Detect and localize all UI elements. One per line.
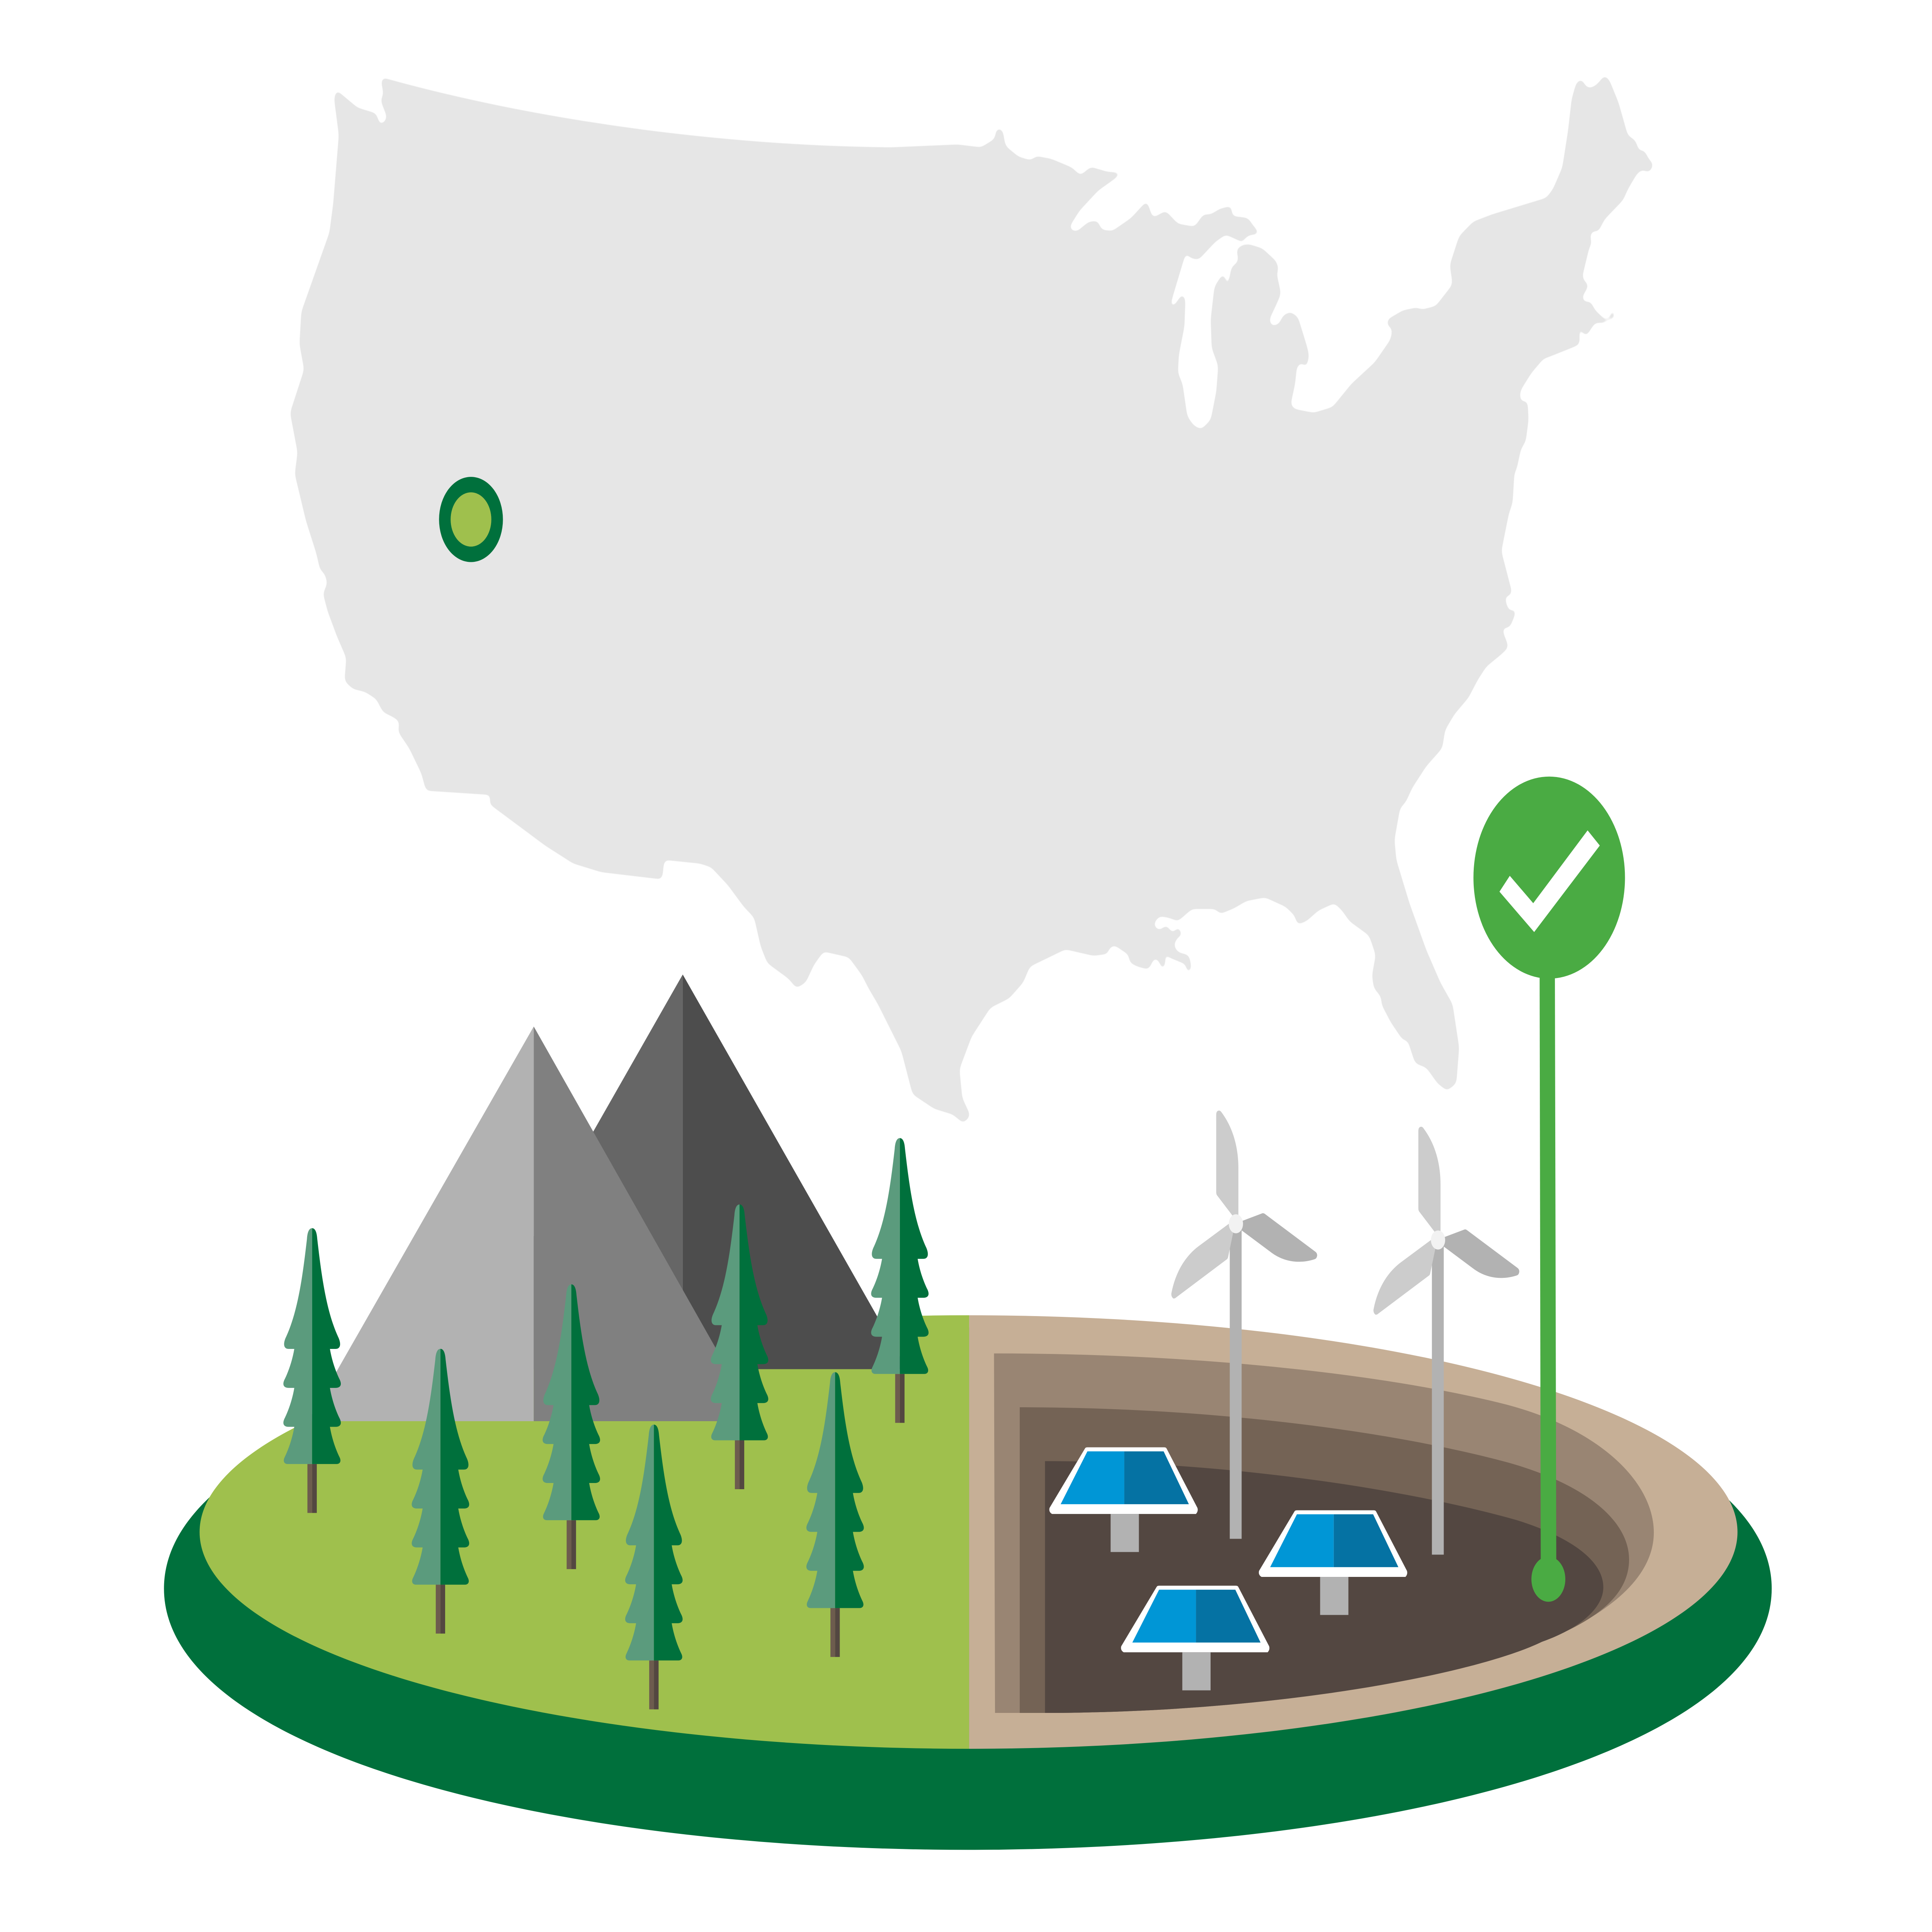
map location marker: [439, 477, 503, 562]
solar panel 1: [1049, 1447, 1198, 1552]
solar panels: [1049, 1447, 1407, 1690]
mountain: rear dark peak: [458, 975, 907, 1369]
tree 4: [625, 1425, 683, 1709]
mine pit layers: [994, 1354, 1654, 1713]
wind turbine 2: [1373, 1127, 1519, 1554]
tree 6: [806, 1372, 864, 1657]
tree 1: [283, 1228, 341, 1513]
map: contiguous United States: [290, 75, 1654, 1123]
location pin with check mark: [1473, 777, 1625, 1602]
icon: check mark: [1500, 830, 1600, 932]
tree 2: [412, 1349, 469, 1634]
tree 5: [711, 1204, 768, 1489]
mountain: front light peak: [308, 1027, 757, 1421]
base disc: dark green: [164, 1327, 1772, 1850]
excavated half of disc: tan surface: [969, 1315, 1738, 1749]
tree 7: [871, 1138, 929, 1423]
solar panel 3: [1121, 1586, 1269, 1690]
wind turbine 1: [1171, 1111, 1317, 1539]
solar panel 2: [1259, 1510, 1407, 1615]
trees: [283, 1138, 929, 1709]
tree 3: [543, 1284, 600, 1569]
grass half of disc: [200, 1315, 969, 1749]
